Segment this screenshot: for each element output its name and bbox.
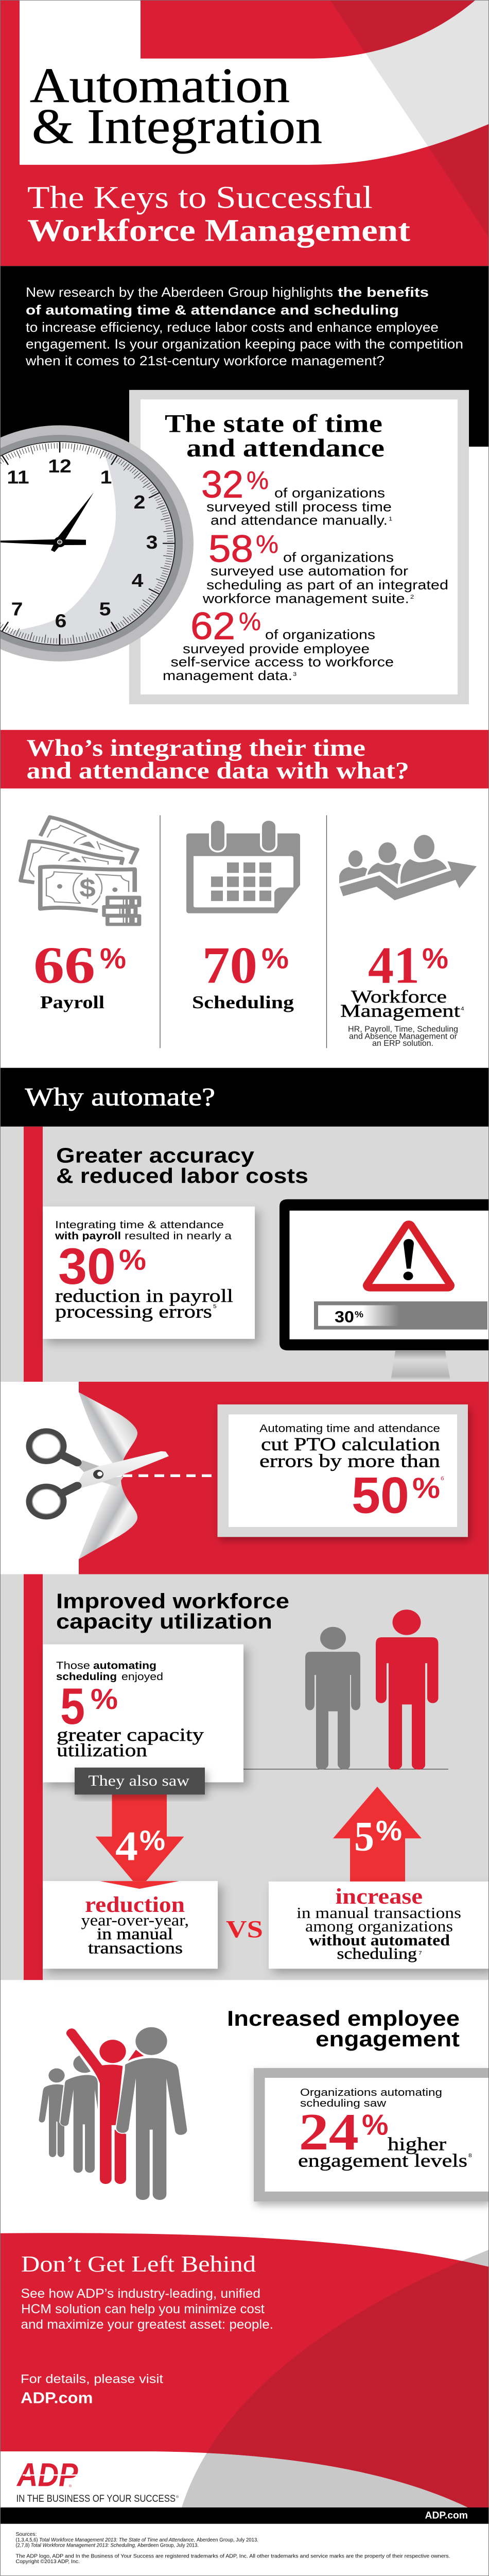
stat: 62%: of organizations [265, 627, 375, 642]
stat: 70% scheduling [192, 937, 294, 1012]
panel heading [227, 2007, 460, 2051]
clock numerals: 7 [11, 599, 23, 620]
card: 5% increase: among organizations [305, 1918, 453, 1935]
stat: 58%: 58 [208, 527, 253, 570]
footer bar: ADP.com [425, 2510, 468, 2521]
card: cut PTO errors: 50 [352, 1467, 409, 1524]
stat: 62%: 3 [293, 671, 296, 677]
card: cut PTO errors: Automating time and attendance [259, 1422, 440, 1434]
stat: 41% workforce management: 4 [461, 1006, 464, 1012]
card: 5% increase: without automated [309, 1932, 450, 1950]
stat: 58%: of organizations [283, 550, 394, 565]
section heading: Who’s integrating their time [27, 734, 365, 761]
tagline: IN THE BUSINESS OF YOUR SUCCESS [16, 2493, 176, 2504]
panel heading [56, 1590, 289, 1634]
card: 24% engagement: higher [388, 2134, 446, 2155]
stat: 41% workforce management: and Absence Management or [349, 1032, 457, 1041]
card: 4% reduction: reduction [85, 1892, 185, 1917]
stat: 70% scheduling: 70 [202, 937, 257, 994]
sources: Sources: [15, 2532, 37, 2537]
card: 24% engagement: engagement levels [298, 2150, 467, 2171]
stat: 62% [163, 604, 394, 683]
stat: 70% scheduling: Scheduling [192, 992, 294, 1012]
sources: The ADP logo, ADP and In the Business of Your Success are registered trademarks of ADP, Inc. All other trademarks and service marks are the property of their respective owners. [15, 2553, 450, 2560]
progress bar [314, 1301, 487, 1330]
intro text [25, 285, 463, 368]
stat: 41% workforce management: HR, Payroll, Time, Scheduling [348, 1025, 458, 1033]
stat: 41% workforce management: 41 [368, 937, 420, 994]
title [30, 58, 322, 154]
subtitle [27, 180, 410, 248]
intro text: New research by the Aberdeen Group highlights [26, 285, 333, 300]
arrow: up 5% [333, 1787, 422, 1882]
panel: don't get left behind [0, 2233, 489, 2507]
stat: 66% payroll: % [100, 942, 126, 974]
closing body text: and maximize your greatest asset: people. [21, 2317, 273, 2331]
arrow: down 4%: 4 [115, 1823, 138, 1869]
clock numerals: 6 [55, 611, 66, 632]
stat: 41% workforce management: an ERP solution. [372, 1039, 433, 1048]
label: vs: VS [226, 1916, 263, 1943]
card: cut PTO errors [217, 1404, 468, 1537]
panel: PTO calculation with scissors [0, 1382, 489, 1574]
panel: intro black band [0, 266, 489, 447]
card: 24% engagement: scheduling saw [300, 2097, 386, 2109]
card: 5% capacity: greater capacity [57, 1725, 204, 1745]
section heading: Why automate? [25, 1082, 215, 1111]
clock numerals: 11 [7, 467, 29, 488]
card: 24% engagement: 24 [299, 2103, 359, 2161]
card: cut PTO errors: 6 [441, 1476, 444, 1482]
stat: 32%: and attendance manually. [211, 513, 388, 528]
arrow: down 4%: % [139, 1825, 165, 1856]
closing body text: HCM solution can help you minimize cost [21, 2301, 265, 2316]
panel heading: & reduced labor costs [56, 1165, 308, 1188]
card: 5% capacity: % [91, 1683, 118, 1715]
panel heading: Improved workforce [56, 1590, 289, 1613]
clock numerals: 5 [99, 599, 111, 620]
stat: 58%: scheduling as part of an integrated [206, 578, 448, 592]
intro text: the benefits [338, 285, 429, 300]
card: 4% reduction: transactions [88, 1940, 183, 1957]
card: 30% reduction: reduction in payroll [55, 1286, 233, 1306]
label: they also saw: They also saw [89, 1772, 190, 1789]
card: 30% reduction [43, 1207, 255, 1339]
arrow: up 5%: % [376, 1816, 402, 1846]
cut paper shape [0, 1382, 137, 1574]
section heading: and attendance data with what? [27, 757, 409, 784]
section heading [27, 734, 409, 784]
icon: clock [0, 426, 194, 662]
panel heading: capacity utilization [56, 1611, 272, 1634]
panel: improved workforce capacity [0, 1574, 489, 1980]
stat: 70% scheduling: % [261, 942, 289, 974]
card: 5% capacity: automating [93, 1659, 156, 1671]
call to action: For details, please visit [21, 2372, 163, 2386]
closing body text [21, 2286, 273, 2331]
card: 5% increase: 7 [418, 1950, 422, 1956]
subtitle: Workforce Management [27, 213, 410, 248]
icon: monitor with warning [280, 1199, 489, 1381]
card: 5% capacity: enjoyed [121, 1670, 163, 1682]
panel heading [165, 410, 385, 462]
call to action: ADP.com [21, 2388, 93, 2406]
clock numerals [7, 456, 158, 632]
stat: 58%: 2 [410, 594, 414, 600]
sources: Aberdeen Group, July 2013. [137, 2543, 199, 2548]
card: cut PTO errors: errors by more than [259, 1451, 440, 1471]
intro text: when it comes to 21st-century workforce management? [25, 353, 385, 368]
stat: 32%: 1 [389, 515, 392, 522]
label: they also saw [75, 1768, 205, 1794]
sources: Total Workforce Management 2013: The State of Time and Attendance, [39, 2537, 195, 2543]
arrow: down 4% [96, 1793, 184, 1889]
clock numerals: 1 [100, 467, 112, 488]
card: 24% engagement: % [362, 2108, 388, 2141]
intro text: to increase efficiency, reduce labor costs and enhance employee [26, 320, 439, 335]
panel: who's integrating header [0, 730, 489, 788]
call to action [21, 2372, 163, 2406]
card: 30% reduction: 5 [213, 1304, 217, 1310]
stat: 32%: 32 [201, 463, 243, 506]
panel heading: Increased employee [227, 2007, 460, 2031]
title: Automation [30, 58, 290, 113]
sources: Copyright ©2013 ADP, Inc. [15, 2559, 80, 2565]
progress bar: % [355, 1309, 363, 1319]
card: 30% reduction: 30 [58, 1238, 116, 1295]
icon: money [21, 817, 143, 927]
arrow: up 5%: 5 [354, 1814, 374, 1859]
card: 5% capacity: utilization [57, 1740, 147, 1760]
card: 5% capacity: scheduling [56, 1670, 117, 1682]
panel: greater accuracy [0, 1127, 489, 1382]
icon: people with rising arrow [339, 835, 477, 900]
card: 4% reduction [43, 1881, 218, 1969]
intro text: of automating time & attendance and scheduling [26, 302, 399, 317]
stat: 58%: workforce management suite. [202, 591, 409, 606]
icon: scissors [29, 1431, 169, 1517]
stat: 62%: % [239, 607, 261, 636]
card: cut PTO errors: % [412, 1471, 440, 1504]
card: cut PTO errors: cut PTO calculation [261, 1434, 440, 1454]
icon: money: $ [79, 874, 96, 903]
card: 30% reduction: % [119, 1243, 146, 1276]
card: 30% reduction: with payroll [55, 1230, 121, 1242]
stat: 32%: % [247, 466, 269, 495]
card: 5% increase [269, 1882, 489, 1969]
icon: calendar [186, 820, 300, 913]
card: 5% capacity: 5 [60, 1678, 85, 1735]
panel heading: Greater accuracy [56, 1144, 254, 1167]
card: 30% reduction: resulted in nearly a [125, 1230, 232, 1242]
card: 5% increase: increase [336, 1884, 423, 1909]
clock numerals: 4 [132, 570, 144, 591]
panel: increased employee engagement [39, 2007, 489, 2201]
stat: 58% [202, 527, 448, 606]
stat: 58%: % [256, 530, 278, 558]
sources: (1,3,4,5,6) [15, 2537, 38, 2543]
panel: why automate band [0, 1068, 489, 1127]
card: 24% engagement: Organizations automating [300, 2086, 442, 2098]
logo: ADP: ADP [16, 2456, 78, 2494]
card: 4% reduction: year-over-year, [81, 1911, 189, 1929]
panel heading: The state of time [165, 410, 382, 438]
stat: 41% workforce management: % [422, 942, 448, 974]
progress bar: 30 [335, 1308, 354, 1326]
card: 24% engagement [254, 2068, 489, 2201]
stat: 62%: surveyed provide employee [183, 641, 370, 656]
panel heading: engagement [316, 2027, 460, 2051]
closing body text: See how ADP’s industry-leading, unified [21, 2286, 260, 2301]
sources [15, 2532, 450, 2565]
icon: gray person [305, 1627, 360, 1770]
stat: 41% workforce management: Workforce [351, 987, 447, 1007]
header banner [0, 0, 489, 266]
sources: Aberdeen Group, July 2013. [197, 2537, 258, 2543]
panel: state of time and attendance [129, 390, 469, 704]
logo: ADP: ® [69, 2484, 72, 2488]
sources: Total Workforce Management 2013: Scheduling, [30, 2543, 136, 2548]
stat: 62%: management data. [163, 668, 292, 683]
clock numerals: 2 [134, 492, 145, 513]
stat: 62%: 62 [190, 604, 235, 647]
dashed cut line [123, 1475, 212, 1477]
card: 4% reduction: in manual [97, 1925, 173, 1943]
stat: 32%: surveyed still process time [206, 499, 392, 514]
card: 5% capacity: Those [56, 1659, 90, 1671]
stat: 66% payroll: 66 [33, 937, 95, 994]
stat: 41% workforce management: Management [340, 1001, 461, 1021]
card: 24% engagement: 8 [468, 2153, 472, 2159]
intro text: engagement. Is your organization keeping pace with the competition [26, 336, 463, 351]
clock numerals: 3 [146, 532, 158, 553]
clock hands [0, 493, 94, 552]
stat: 58%: surveyed use automation for [211, 564, 408, 579]
stat: 41% workforce management [340, 937, 464, 1048]
card: 5% increase: scheduling [337, 1945, 417, 1962]
stat: 66% payroll [33, 937, 126, 1012]
icon: warning triangle [370, 1227, 448, 1285]
stat: 32% [201, 463, 392, 528]
clock numerals: 12 [48, 456, 72, 477]
tagline: ® [176, 2495, 179, 2499]
stat: 62%: self-service access to workforce [171, 654, 394, 669]
card: 5% increase: in manual transactions [296, 1905, 461, 1922]
card: 30% reduction: Integrating time & attendance [55, 1218, 224, 1231]
card: 30% reduction: processing errors [55, 1301, 212, 1322]
stat: 66% payroll: Payroll [40, 992, 104, 1012]
panel heading: and attendance [186, 434, 385, 462]
card: 5% capacity [43, 1645, 243, 1782]
icon: red person [376, 1609, 439, 1770]
footer bar [0, 2507, 489, 2524]
sources: (2,7,8) [15, 2543, 30, 2548]
subtitle: The Keys to Successful [27, 180, 373, 215]
closing heading: Don’t Get Left Behind [21, 2251, 256, 2277]
icon: group of people [39, 2027, 187, 2200]
title: & Integration [32, 99, 322, 154]
panel heading [56, 1144, 308, 1188]
stat: 32%: of organizations [274, 485, 385, 500]
